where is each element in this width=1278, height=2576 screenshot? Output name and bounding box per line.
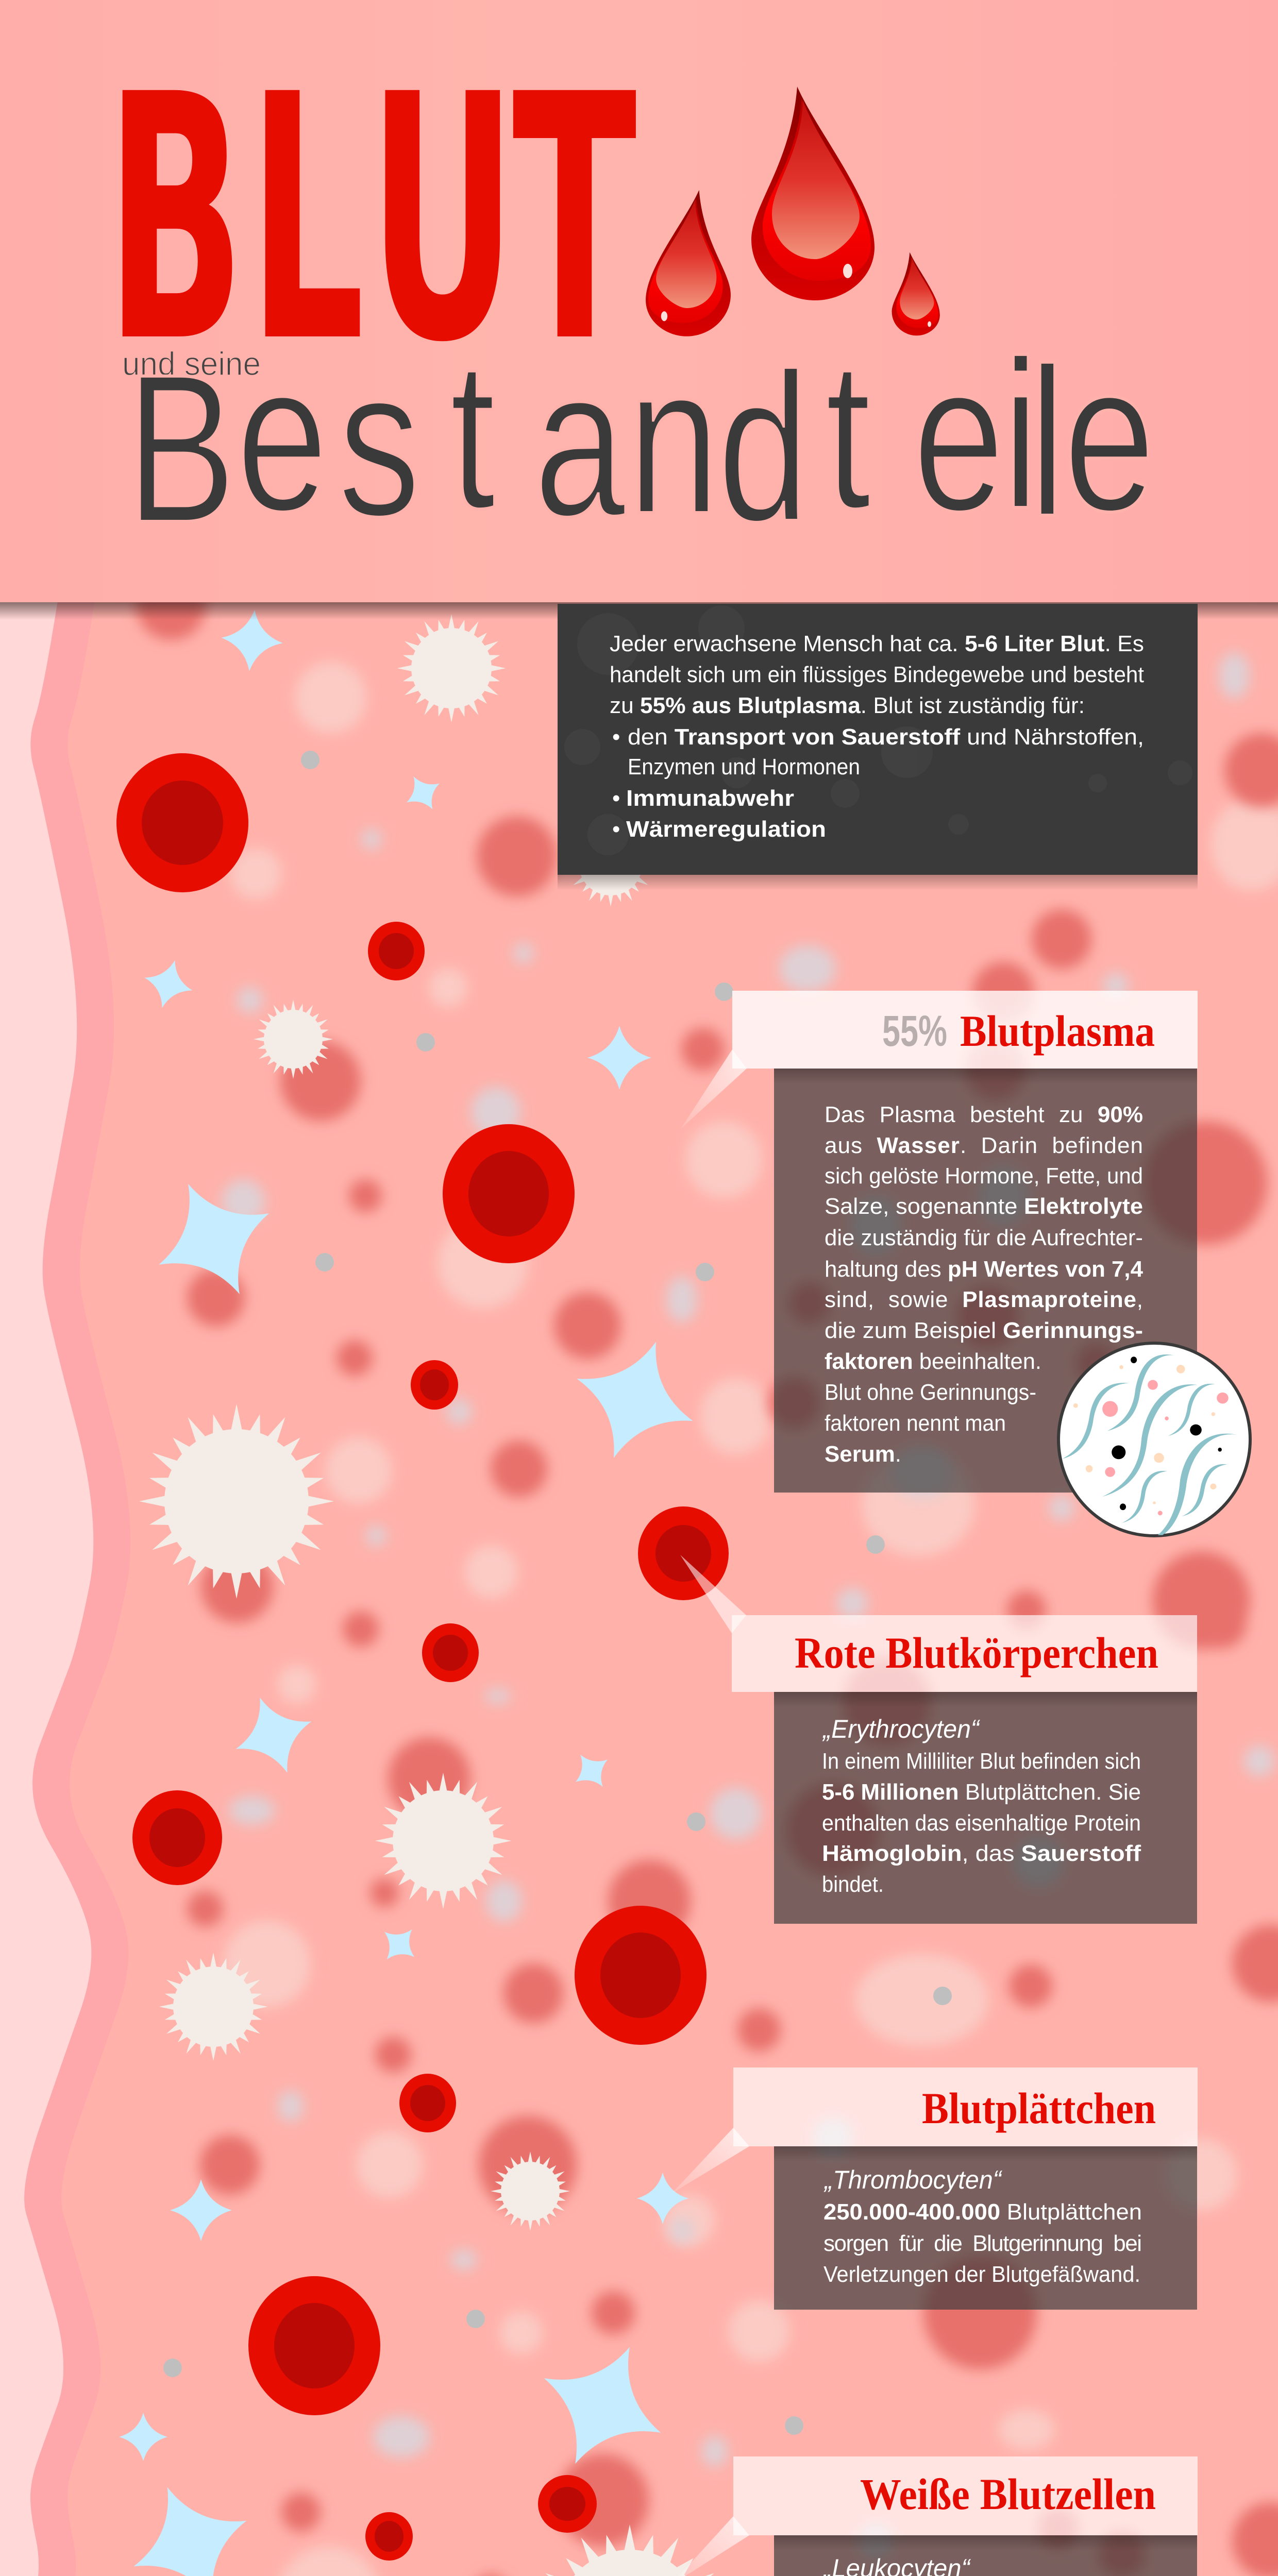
subtitle: Bestandteile: Bestandteile	[126, 316, 1155, 566]
red blood cells	[95, 753, 729, 2576]
intro text	[610, 631, 1144, 842]
body text: sind, sowie Plasmaproteine,	[825, 1287, 1143, 1312]
panel top shadow	[774, 2146, 1197, 2162]
body text: die zuständig für die Aufrechter-	[825, 1225, 1143, 1250]
intro text: den Transport von Sauerstoff und Nährstoffen,	[628, 724, 1144, 750]
body text: Serum.	[825, 1442, 901, 1467]
plasma particles: gray dots	[163, 751, 952, 2576]
body text	[822, 1715, 1141, 1897]
heading	[882, 1006, 1155, 1056]
body text: enthalten das eisenhaltige Protein	[822, 1810, 1141, 1836]
body text: die zum Beispiel Gerinnungs-	[825, 1318, 1143, 1343]
subtitle: und seine: und seine	[122, 345, 261, 382]
body text: Hämoglobin , das Sauerstoff	[822, 1841, 1141, 1866]
blood vessel wall	[0, 598, 130, 2576]
intro panel shadow	[558, 875, 1198, 890]
icon: blood drops	[646, 87, 940, 336]
body text: aus Wasser. Darin befinden	[825, 1133, 1143, 1158]
intro text: Jeder erwachsene Mensch hat ca. 5-6 Liter Blut. Es	[610, 631, 1144, 656]
header panel	[0, 0, 1278, 602]
intro text: Enzymen und Hormonen	[628, 754, 860, 779]
callout pointer	[681, 1049, 747, 1129]
platelets: blue stars	[111, 607, 714, 2576]
intro text: Immunabwehr	[626, 786, 794, 811]
body text: haltung des pH Wertes von 7,4	[825, 1257, 1144, 1282]
callout pointer	[680, 1555, 746, 1633]
body text: „Erythrocyten“	[822, 1715, 980, 1743]
blurred background cells: bluish	[222, 652, 1275, 2576]
intro text: •	[612, 817, 620, 842]
icon: plasma circle	[1058, 1343, 1250, 1536]
panel: introduction	[558, 604, 1198, 875]
intro text: handelt sich um ein flüssiges Bindegewebe und besteht	[610, 662, 1144, 687]
title: BLUT: BLUT	[106, 24, 638, 417]
intro text: •	[612, 724, 620, 750]
body text: „Thrombocyten“	[823, 2165, 1002, 2194]
section: Blutplasma	[681, 991, 1250, 1536]
header shadow	[0, 602, 1278, 620]
intro text: •	[612, 786, 620, 811]
heading: Blutplasma	[960, 1006, 1155, 1056]
intro text: zu 55% aus Blutplasma. Blut ist zuständig für:	[610, 693, 1085, 718]
text panel	[774, 2535, 1197, 2576]
body text: faktoren nennt man	[825, 1411, 1006, 1436]
body text: Das Plasma besteht zu 90%	[825, 1102, 1143, 1127]
body text: sich gelöste Hormone, Fette, und	[825, 1163, 1143, 1189]
body text: sorgen für die Blutgerinnung bei	[823, 2231, 1142, 2256]
body text: In einem Milliliter Blut befinden sich	[822, 1749, 1141, 1774]
body text: Blut ohne Gerinnungs-	[825, 1380, 1036, 1405]
callout pointer	[670, 2516, 749, 2576]
heading: 55%	[882, 1007, 947, 1055]
section: Weiße Blutzellen	[670, 2456, 1221, 2576]
heading: Blutplättchen	[922, 2083, 1156, 2133]
body text: bindet.	[822, 1872, 884, 1897]
panel top shadow	[774, 2535, 1197, 2551]
heading bar	[733, 2067, 1198, 2146]
white blood cells	[139, 614, 727, 2576]
section: Blutplättchen	[672, 2067, 1198, 2310]
body text	[823, 2165, 1142, 2287]
body text	[825, 1102, 1144, 1467]
panel top shadow	[774, 1692, 1197, 1707]
text panel	[774, 1069, 1197, 1493]
heading: Rote Blutkörperchen	[795, 1628, 1158, 1677]
panel texture	[564, 605, 1192, 855]
blurred background cells: pale	[223, 662, 1278, 2576]
callout pointer	[672, 2128, 749, 2193]
text panel	[774, 2146, 1197, 2310]
text panel	[774, 1692, 1197, 1924]
heading bar	[732, 991, 1198, 1069]
panel top shadow	[774, 1069, 1197, 1084]
section: Rote Blutkörperchen	[680, 1555, 1197, 1924]
blurred background cells: dark red	[136, 570, 1278, 2576]
heading: Weiße Blutzellen	[860, 2469, 1156, 2519]
body text: Salze, sogenannte Elektrolyte	[825, 1194, 1143, 1219]
heading bar	[733, 2456, 1198, 2535]
body background	[0, 598, 1278, 2576]
body text: 250.000-400.000 Blutplättchen	[823, 2199, 1142, 2225]
body text: Verletzungen der Blutgefäßwand.	[823, 2262, 1140, 2287]
body text: faktoren beeinhalten.	[825, 1349, 1041, 1374]
heading bar	[732, 1615, 1197, 1692]
intro text: Wärmeregulation	[626, 817, 826, 842]
body text: 5-6 Millionen Blutplättchen. Sie	[822, 1780, 1141, 1805]
